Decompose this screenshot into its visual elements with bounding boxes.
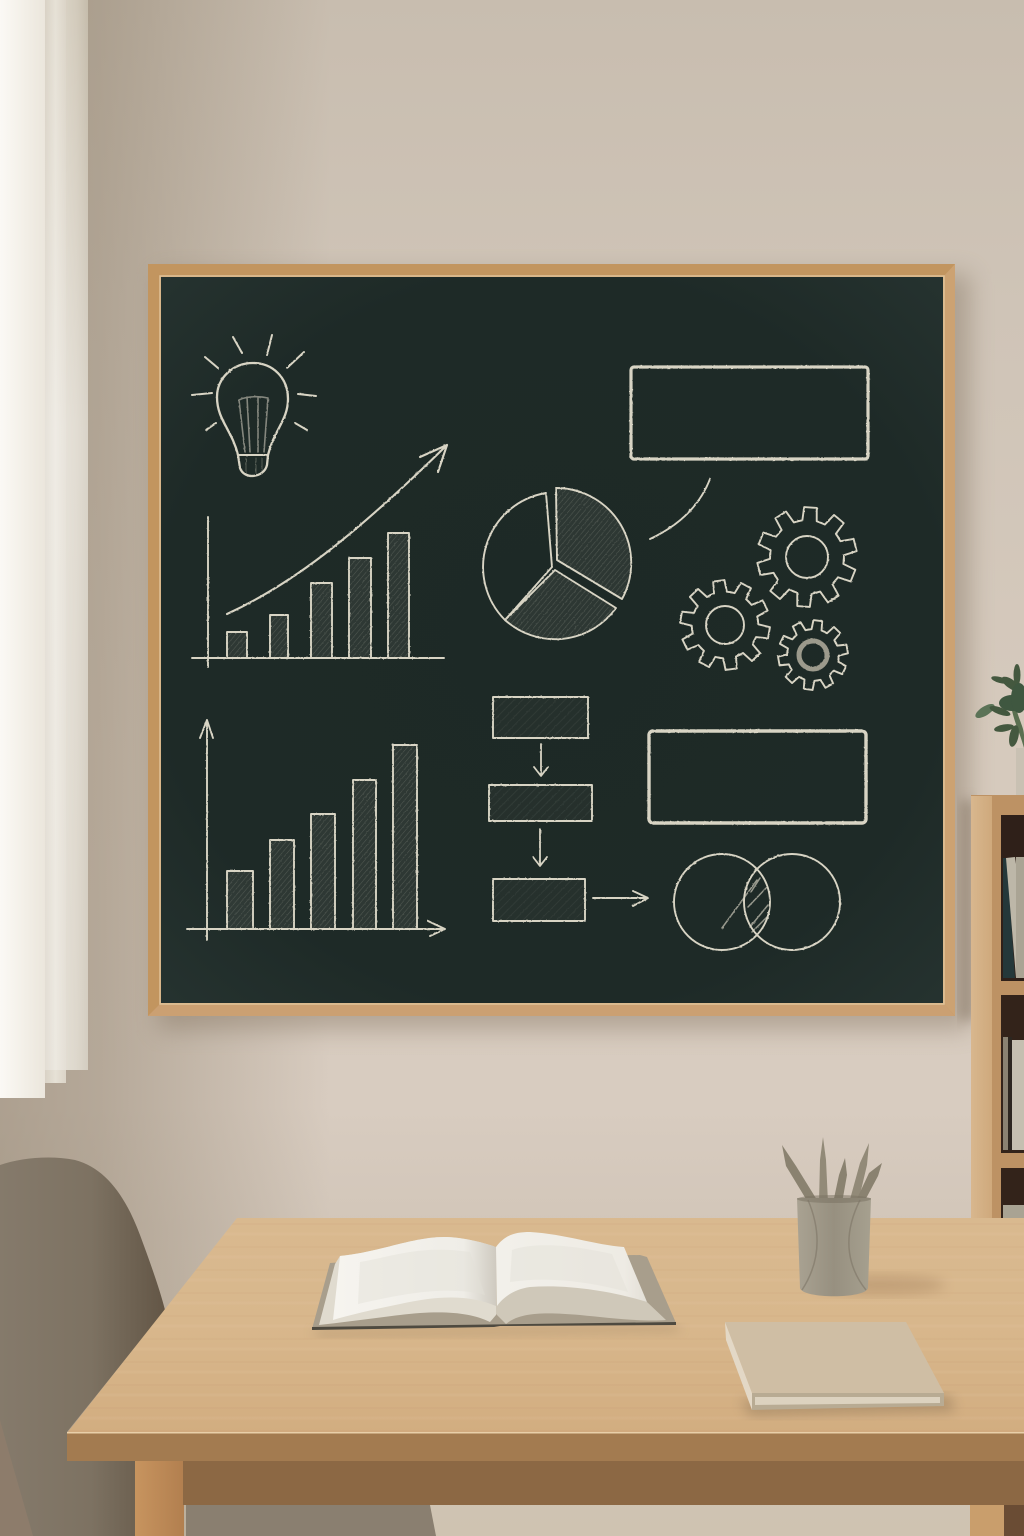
notebook cover (725, 1322, 944, 1393)
chair seat under desk (186, 1505, 436, 1536)
plant pot (1016, 748, 1024, 795)
text hint right (510, 1245, 628, 1292)
curved connector (650, 479, 710, 539)
shelf compartment middle (1001, 995, 1024, 1153)
book cover (312, 1255, 676, 1329)
notebook (725, 1322, 955, 1416)
bookshelf (960, 795, 1024, 1219)
notebook shadow (740, 1395, 955, 1416)
left leg (135, 1461, 184, 1536)
left page (333, 1237, 496, 1320)
axes with arrows (187, 720, 445, 940)
book shadow (312, 1325, 680, 1336)
chair (0, 1158, 165, 1536)
empty box lower right (649, 731, 866, 823)
chalkboard surface (161, 277, 943, 1003)
books bottom shelf (1003, 1205, 1024, 1218)
pencils (782, 1137, 882, 1206)
chalk drawings (187, 335, 868, 950)
empty box top right (631, 367, 868, 459)
board shadow (158, 274, 970, 1030)
desk front edge (67, 1433, 1024, 1461)
desk (67, 1218, 1024, 1536)
bars (227, 533, 409, 658)
chalkboard frame (148, 264, 955, 1016)
gear small (773, 616, 853, 694)
notebook pages (752, 1393, 944, 1410)
axes (192, 517, 444, 667)
right leg (970, 1504, 1004, 1536)
growth arrow (227, 445, 447, 614)
plant (973, 664, 1024, 748)
bar chart with growth arrow (192, 445, 447, 667)
desk top (67, 1218, 1024, 1433)
left page block (319, 1237, 496, 1325)
shelf side panel (971, 796, 992, 1218)
text hint left (358, 1250, 485, 1304)
cup shadow (815, 1275, 945, 1295)
books middle shelf (1003, 1037, 1024, 1150)
flowchart (489, 697, 648, 921)
open book (312, 1232, 680, 1336)
shelf compartment bottom (1001, 1168, 1024, 1218)
curtain (0, 0, 88, 1098)
right page block (496, 1247, 666, 1324)
gear large (753, 504, 861, 610)
pencil cup (797, 1195, 871, 1296)
pie chart (483, 488, 631, 639)
venn diagram (674, 854, 840, 950)
gear medium (673, 574, 777, 676)
desk apron (183, 1461, 1024, 1505)
bars (227, 745, 417, 929)
right page (496, 1232, 647, 1306)
notebook spine (725, 1322, 752, 1410)
wall shading from window side (0, 0, 330, 1536)
books top shelf (1003, 857, 1024, 978)
shelf compartment top (1001, 815, 1024, 981)
wall behind chair lower left (0, 1400, 60, 1536)
icon: light bulb (192, 335, 316, 476)
bar chart lower (187, 720, 445, 940)
